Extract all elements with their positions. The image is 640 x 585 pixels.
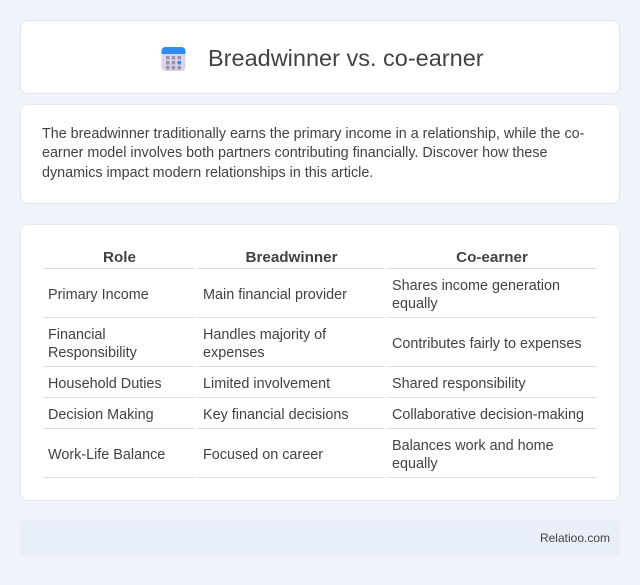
table header: Role — [103, 249, 136, 266]
table card — [20, 224, 620, 501]
table rows: Key financial decisions — [203, 407, 349, 423]
footer bar — [20, 521, 620, 555]
table header: Co-earner — [456, 249, 528, 266]
title: Breadwinner vs. co-earner — [208, 45, 484, 71]
table rows: Financial — [48, 327, 106, 343]
table rows: Limited involvement — [203, 376, 330, 392]
table header: Breadwinner — [246, 249, 338, 266]
table rows: Handles majority of — [203, 327, 326, 343]
intro text: dynamics impact modern relationships in this article. — [42, 165, 373, 181]
table rows: Shares income generation — [392, 278, 560, 294]
table rows: equally — [392, 296, 438, 312]
table rows: Decision Making — [48, 407, 154, 423]
footer text: Relatioo.com — [540, 531, 610, 545]
table rows: Shared responsibility — [392, 376, 526, 392]
table rows: Primary Income — [48, 287, 149, 303]
intro text: earner model involves both partners contributing financially. Discover how these — [42, 145, 547, 161]
table rows: equally — [392, 456, 438, 472]
table rows: Household Duties — [48, 376, 162, 392]
table rows: Work-Life Balance — [48, 447, 165, 463]
title card — [20, 20, 620, 94]
table rows: expenses — [203, 345, 265, 361]
intro card — [20, 104, 620, 204]
table rows: Collaborative decision-making — [392, 407, 584, 423]
table rows: Contributes fairly to expenses — [392, 336, 582, 352]
table rows: Main financial provider — [203, 287, 347, 303]
table header — [103, 249, 528, 266]
table rows: Balances work and home — [392, 438, 554, 454]
intro text — [42, 126, 584, 181]
table rows: Responsibility — [48, 345, 137, 361]
intro text: The breadwinner traditionally earns the primary income in a relationship, while the co- — [42, 126, 584, 142]
icon: calendar — [162, 47, 186, 71]
table rows: Focused on career — [203, 447, 323, 463]
comparison table — [43, 249, 597, 478]
